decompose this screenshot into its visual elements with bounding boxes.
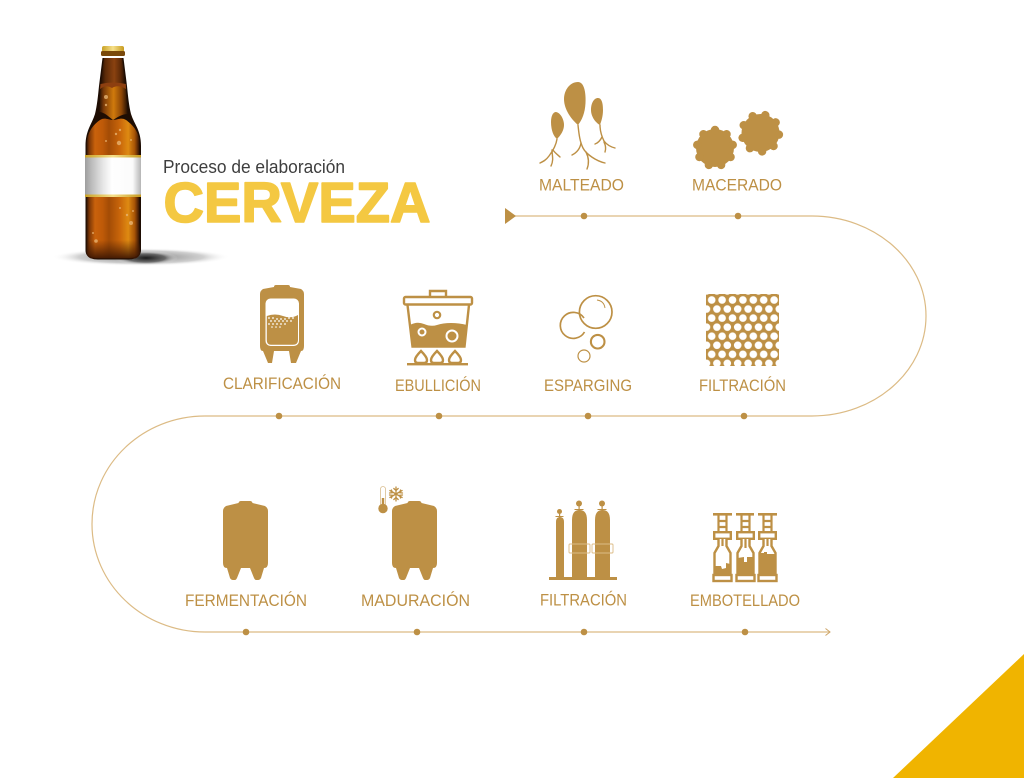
icon: snowflake	[390, 487, 402, 501]
step: clarificacion	[223, 285, 341, 393]
label: MADURACIÓN	[361, 591, 470, 610]
icon: bottling machine	[713, 513, 777, 581]
start arrow	[505, 208, 516, 224]
step: macerado	[692, 110, 783, 194]
bottle shadow	[52, 248, 230, 266]
label: CLARIFICACIÓN	[223, 374, 341, 393]
step: fermentacion	[185, 501, 307, 610]
icon: bubbles	[560, 296, 612, 362]
icon: beer bottle	[85, 46, 141, 260]
icon: fermentation tank	[223, 501, 268, 580]
icon: filter mesh	[706, 294, 779, 366]
icon: thermometer	[378, 486, 388, 513]
step: filtracion 1	[699, 294, 786, 395]
icon: milled grain	[692, 110, 783, 170]
icon: germinating barley	[540, 82, 615, 169]
label: MALTEADO	[539, 176, 624, 194]
step: malteado	[539, 82, 624, 194]
step: filtracion 2	[540, 500, 627, 610]
step: embotellado	[690, 513, 800, 610]
end arrow	[826, 628, 830, 636]
label: EBULLICIÓN	[395, 376, 481, 395]
subtitle: Proceso de elaboración	[163, 157, 345, 177]
label: FILTRACIÓN	[699, 376, 786, 395]
label: FERMENTACIÓN	[185, 591, 307, 610]
step: esparging	[544, 296, 632, 395]
step: ebullicion	[395, 291, 481, 395]
path step dots	[243, 213, 748, 635]
icon: maturation tank	[392, 501, 437, 580]
label: MACERADO	[692, 176, 782, 194]
icon: clarifying tank	[260, 285, 304, 363]
icon: boiling pot on burner	[404, 291, 472, 365]
label: FILTRACIÓN	[540, 591, 627, 610]
process path line	[92, 208, 926, 632]
icon: filter cylinders	[549, 500, 617, 580]
corner triangle	[893, 654, 1024, 778]
label: EMBOTELLADO	[690, 592, 800, 610]
label: ESPARGING	[544, 377, 632, 395]
step: maduracion	[361, 486, 470, 610]
title: CERVEZA	[164, 171, 430, 235]
